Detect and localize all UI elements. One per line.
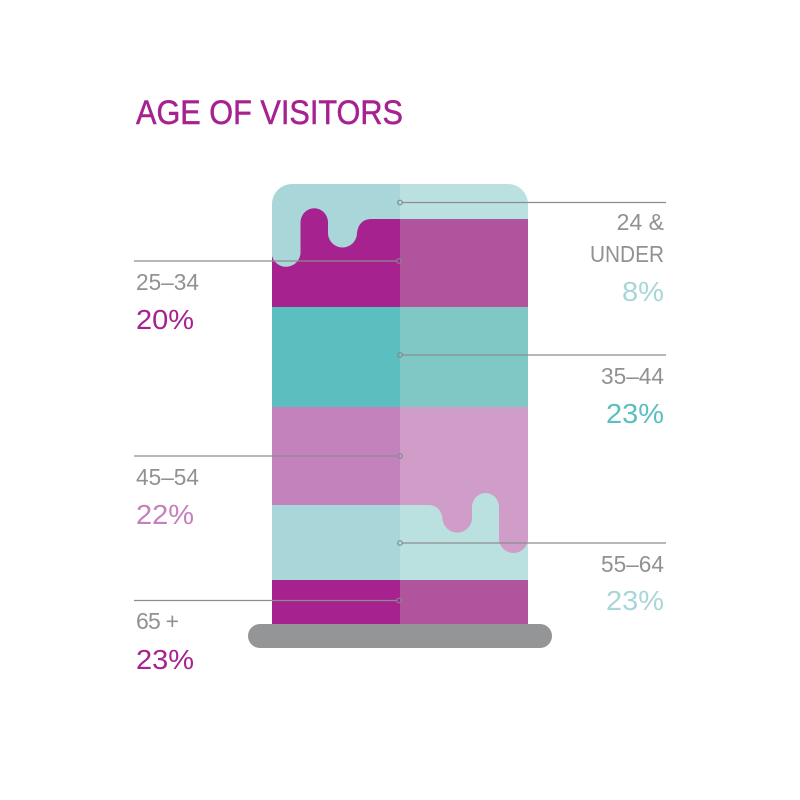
callout: 55-64: 55–64 <box>601 551 664 577</box>
chart: glass column of age bands <box>272 184 528 624</box>
callout: 65 plus: 65 + <box>136 608 179 634</box>
left half of column <box>272 184 400 624</box>
callout: 45-54: 22% <box>136 499 194 530</box>
callout: 55-64: 23% <box>606 585 664 616</box>
title: AGE OF VISITORS <box>136 94 403 132</box>
callout: 24 and under: UNDER <box>590 241 664 267</box>
callout: 24 and under <box>398 200 666 307</box>
callout: 24 and under: 24 & <box>617 209 664 235</box>
callout: 45-54: 45–54 <box>136 464 199 490</box>
callout: 25-34 <box>134 259 401 335</box>
callout: 35-44: 23% <box>606 398 664 429</box>
right half of column <box>400 184 528 624</box>
callout: 24 and under: 8% <box>622 276 664 307</box>
callout: 25-34: 20% <box>136 304 194 335</box>
callout: 25-34: 25–34 <box>136 269 199 295</box>
callout: 65 plus <box>134 598 401 675</box>
callout: 45-54 <box>134 454 402 530</box>
callout: 35-44 <box>398 353 666 429</box>
callout: 55-64 <box>398 541 666 616</box>
base of column <box>248 624 552 648</box>
callout: 35-44: 35–44 <box>601 363 664 389</box>
infographic canvas <box>134 100 666 670</box>
callout: 65 plus: 23% <box>136 644 194 675</box>
